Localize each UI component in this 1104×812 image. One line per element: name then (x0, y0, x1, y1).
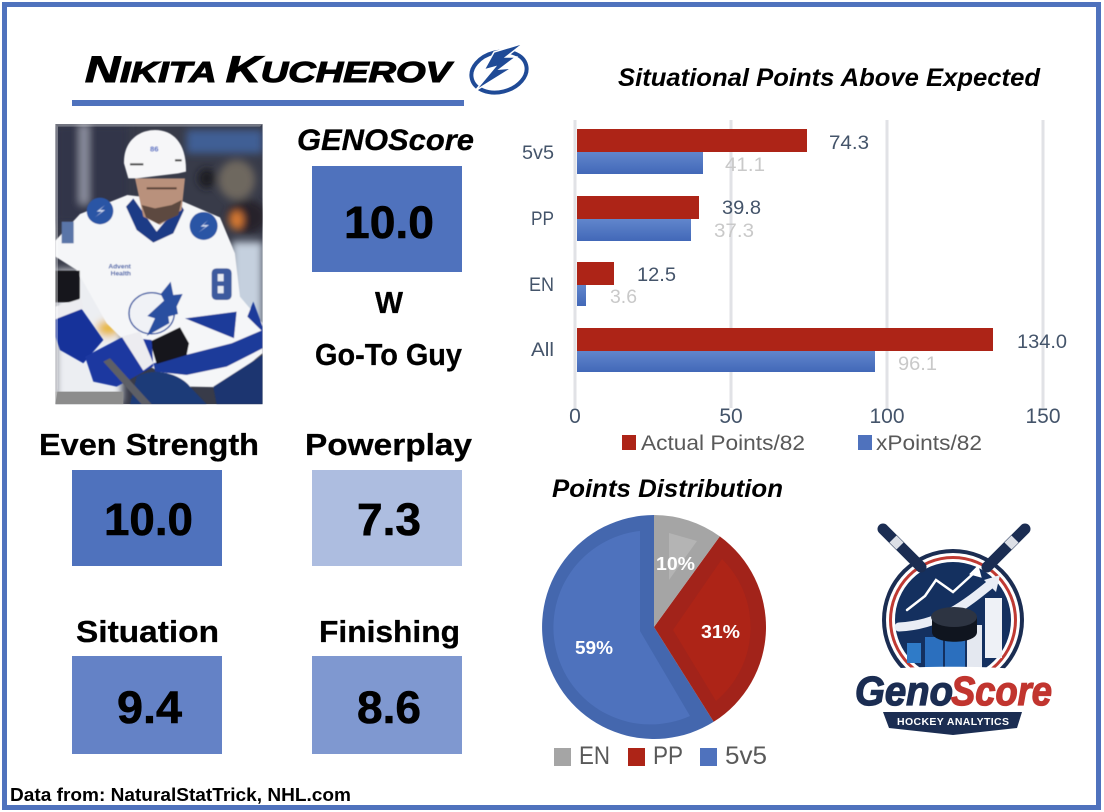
category labels: PP (531, 209, 554, 230)
sleeve patches (87, 198, 113, 224)
pie legend (554, 742, 767, 770)
crossed sticks (883, 529, 1025, 567)
trend lines (899, 566, 1000, 627)
data source note: Data from: NaturalStatTrick, NHL.com (10, 785, 351, 805)
axis labels: 0 (569, 405, 581, 428)
bars: All: 96.1 (898, 354, 937, 375)
axis labels (569, 405, 1061, 428)
logo: GenoScore Hockey Analytics (855, 529, 1052, 735)
bars: All: 134.0 (1017, 332, 1067, 353)
score: powerplay (305, 427, 473, 566)
bar chart: situational points (522, 120, 1067, 455)
chart legend: Actual Points/82 (641, 432, 805, 455)
sleeve numbers (62, 222, 74, 243)
bars: 5v5: 74.3 (829, 133, 869, 154)
bars: EN: 3.6 (610, 287, 637, 308)
player photo: 86 (150, 144, 159, 153)
slice labels: 59% (575, 638, 613, 658)
gloves (55, 307, 103, 363)
category labels: EN (529, 275, 554, 296)
score: powerplay: Powerplay (305, 427, 473, 462)
pie chart: points distribution (542, 515, 766, 739)
puck (931, 607, 977, 642)
bars: 5v5 (577, 129, 869, 176)
banner: HOCKEY ANALYTICS (897, 716, 1009, 728)
axis labels: 100 (869, 405, 905, 428)
slice: PP 31% (654, 536, 766, 722)
wordmark (855, 667, 1052, 714)
slice labels: 10% (656, 554, 695, 574)
player photo (55, 124, 267, 404)
score: powerplay: 7.3 (357, 494, 421, 545)
bars: All (577, 328, 1067, 375)
category labels: 5v5 (522, 143, 554, 164)
slice labels (575, 554, 740, 658)
score: situation: Situation (76, 614, 219, 649)
slice: EN 10% (654, 515, 720, 627)
axis labels: 50 (719, 405, 743, 428)
helmet (124, 130, 186, 178)
score: finishing: 8.6 (357, 682, 421, 733)
bars: PP (577, 196, 761, 242)
banner (883, 712, 1022, 735)
score: even strength: Even Strength (39, 427, 259, 462)
pie chart title: Points Distribution (552, 475, 783, 503)
title: player name: N IKITA K UCHEROV (85, 49, 454, 90)
crest circle (882, 549, 1024, 691)
pie legend: EN (579, 742, 610, 770)
icon: Tampa Bay Lightning logo (467, 43, 531, 98)
chart legend: xPoints/82 (876, 432, 982, 455)
score: finishing (312, 614, 462, 754)
face (135, 178, 185, 225)
archetype label: Go-To Guy (315, 337, 463, 372)
bars: EN: 12.5 (637, 265, 676, 286)
pie legend: PP (653, 742, 683, 770)
bars: EN (577, 262, 676, 308)
chart title: Situational Points Above Expected (618, 64, 1041, 92)
score: finishing: Finishing (319, 614, 460, 649)
slice labels: 31% (701, 622, 740, 642)
score: even strength (39, 427, 259, 566)
title underline (72, 100, 464, 106)
wordmark: Geno (855, 668, 953, 714)
chart legend (622, 432, 982, 455)
bars: 5v5: 41.1 (725, 155, 765, 176)
score: even strength: 10.0 (104, 494, 193, 545)
pants (130, 372, 207, 404)
bars: PP: 39.8 (722, 198, 761, 219)
score: situation (72, 614, 222, 754)
stripe (153, 330, 263, 375)
score: GENOScore: GENOScore (297, 124, 474, 157)
category labels (522, 143, 554, 361)
jersey (55, 195, 263, 387)
stick (103, 358, 152, 404)
score: situation: 9.4 (117, 682, 182, 733)
sponsor: Advent (108, 263, 132, 270)
rising bars (907, 598, 1002, 670)
photo bevel (55, 124, 263, 404)
score: GENOScore (297, 124, 474, 272)
axis labels: 150 (1025, 405, 1061, 428)
arm and cuff (55, 271, 80, 302)
bars: PP: 37.3 (714, 221, 754, 242)
pie legend: 5v5 (725, 742, 767, 770)
score: GENOScore: 10.0 (344, 197, 434, 248)
position label: W (375, 285, 404, 320)
category labels: All (531, 340, 554, 361)
player photo: Health (111, 271, 131, 278)
crest (129, 293, 174, 334)
slice: 5v5 59% (542, 515, 714, 739)
wordmark: Score (951, 668, 1052, 714)
